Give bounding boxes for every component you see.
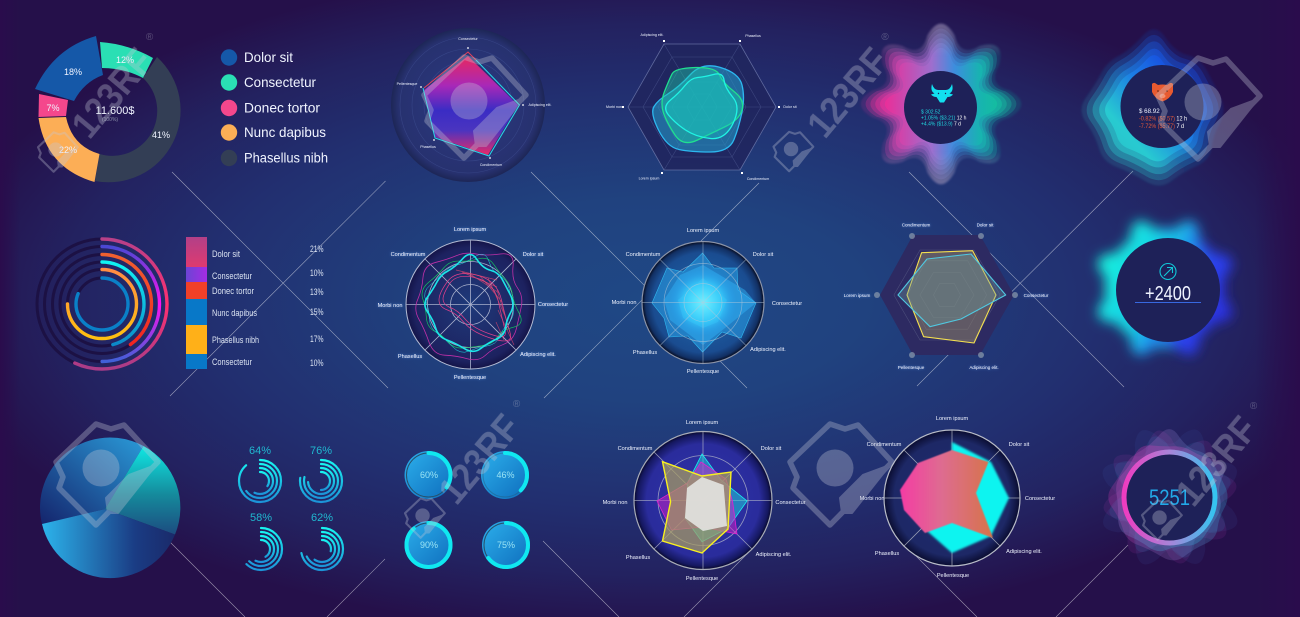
percent disks — [404, 451, 530, 569]
radar: dark hexagon: Consectetur — [1024, 293, 1049, 298]
radar: filled blurred polygons: Adipiscing elit. — [1006, 549, 1042, 555]
radar: dark hexagon: Pellentesque — [898, 365, 925, 370]
radar: hexagon with blobs: Adipiscing elit. — [641, 33, 663, 37]
radar: overlapping polygons — [603, 420, 806, 582]
radar: filled blurred polygons: Morbi non — [860, 496, 884, 502]
watermark text: 123RF — [800, 41, 897, 146]
radar: blue star: Condimentum — [626, 252, 661, 258]
radar: blue star: Dolor sit — [753, 252, 774, 258]
radar: gradient pentagon: Consectetur — [458, 37, 478, 41]
glowing counter — [1071, 194, 1259, 382]
watermark text: ® — [513, 399, 521, 410]
donut legend: Nunc dapibus — [244, 124, 326, 140]
radar: multi-line: Pellentesque — [454, 375, 486, 381]
radar: filled blurred polygons: Lorem ipsum — [936, 416, 968, 422]
watermark text — [64, 32, 1266, 514]
stacked bar with labels: 21% — [310, 244, 324, 254]
radar: blue star: Morbi non — [612, 300, 636, 306]
icon: bull head — [931, 84, 953, 102]
radar: gradient pentagon: Phasellus — [420, 145, 436, 149]
stacked bar with labels: 10% — [310, 268, 324, 278]
radar: overlapping polygons: Adipiscing elit. — [756, 552, 792, 558]
radar: multi-line: Dolor sit — [523, 252, 544, 258]
donut chart — [35, 36, 181, 182]
radar: multi-line: Phasellus — [398, 354, 422, 360]
donut chart: 11.600$ — [96, 105, 134, 117]
radar: overlapping polygons: Dolor sit — [761, 446, 782, 452]
bull market gauge: $ 302.52 — [921, 110, 941, 116]
stacked bar with labels: Dolor sit — [212, 249, 240, 259]
radar: filled blurred polygons — [860, 416, 1055, 579]
radar: filled blurred polygons: Phasellus — [875, 551, 899, 557]
donut chart: (100%) — [102, 117, 118, 123]
percent disks: 90% — [420, 540, 438, 550]
bull market gauge — [861, 24, 1021, 184]
concentric progress rings: 64% — [249, 445, 271, 457]
radar: blue star: Pellentesque — [687, 369, 719, 375]
radar: multi-line: Consectetur — [538, 302, 568, 308]
number gauge 5251: 5251 — [1149, 485, 1190, 510]
percent disks: 75% — [497, 540, 515, 550]
stacked bar with labels: 10% — [310, 358, 324, 368]
ring set 76% — [300, 460, 342, 502]
stacked bar with labels: 17% — [310, 334, 324, 344]
radar: gradient pentagon: Adipiscing elit. — [529, 103, 551, 107]
radar: overlapping polygons: Condimentum — [618, 446, 653, 452]
radar: overlapping polygons: Lorem ipsum — [686, 420, 718, 426]
radar: dark hexagon — [844, 222, 1049, 370]
radar: filled blurred polygons: Pellentesque — [937, 573, 969, 579]
radar: gradient pentagon: Pellentesque — [397, 82, 417, 86]
donut chart: 18% — [64, 67, 82, 77]
donut legend: Donec tortor — [244, 100, 320, 116]
number gauge 5251 — [1076, 403, 1264, 591]
stacked bar with labels: Donec tortor — [212, 286, 254, 296]
concentric ring chart — [37, 239, 167, 369]
donut chart: 22% — [59, 145, 77, 155]
ring set 62% — [301, 528, 343, 570]
radar: filled blurred polygons: Condimentum — [867, 442, 902, 448]
concentric progress rings: 58% — [250, 512, 272, 524]
radar: dark hexagon: Dolor sit — [977, 222, 994, 228]
watermark text: 123RF — [1168, 409, 1266, 514]
radar: dark hexagon: Condimentum — [902, 222, 930, 228]
bull market gauge: +4.4% ($13.9) 7 d — [921, 122, 961, 128]
bear market gauge — [1082, 29, 1224, 186]
bear market gauge: -0.82% ($0.57) 12 h — [1139, 116, 1187, 122]
watermark text: 123RF — [431, 407, 529, 512]
radar: multi-line: Adipiscing elit. — [520, 352, 556, 358]
ring set 64% — [239, 460, 281, 502]
radar: multi-line: Morbi non — [378, 303, 402, 309]
radar: filled blurred polygons: Dolor sit — [1009, 442, 1030, 448]
pie chart — [40, 437, 180, 578]
watermark text: ® — [881, 32, 889, 43]
radar: blue star: Phasellus — [633, 350, 657, 356]
bear market gauge: $ 68.92 — [1139, 108, 1160, 115]
stacked bar with labels: Nunc dapibus — [212, 308, 257, 318]
stacked bar with labels — [186, 237, 324, 369]
icon: bear head — [1152, 83, 1173, 102]
radar: blue star: Lorem ipsum — [687, 228, 719, 234]
radar: gradient pentagon: Condimentum — [480, 163, 502, 167]
icon: arrow in circle — [1160, 264, 1176, 280]
radar: blue star: Adipiscing elit. — [750, 347, 786, 353]
radar: overlapping polygons: Pellentesque — [686, 576, 718, 582]
radar: multi-line: Condimentum — [391, 252, 426, 258]
radar: hexagon with blobs: Condimentum — [747, 177, 769, 181]
donut legend: Phasellus nibh — [244, 150, 328, 166]
glowing counter: +2400 — [1145, 283, 1191, 305]
radar: overlapping polygons: Phasellus — [626, 555, 650, 561]
concentric progress rings — [239, 445, 343, 570]
donut chart: 41% — [152, 130, 170, 140]
radar: overlapping polygons: Consectetur — [775, 500, 806, 506]
radar: hexagon with blobs: Dolor sit — [783, 105, 797, 109]
stacked bar with labels: Consectetur — [212, 357, 252, 367]
donut legend: Dolor sit — [244, 49, 293, 65]
radar: overlapping polygons: Morbi non — [603, 500, 627, 506]
ring set 58% — [240, 528, 282, 570]
percent disks: 46% — [496, 470, 515, 480]
watermark text: ® — [1250, 401, 1258, 412]
watermark text: ® — [146, 32, 154, 43]
radar: dark hexagon: Adipiscing elit. — [969, 365, 999, 370]
radar: hexagon with blobs: Lorem ipsum — [639, 176, 659, 180]
radar: gradient pentagon — [391, 28, 551, 182]
percent disks: 60% — [420, 470, 438, 480]
radar: multi-line: Lorem ipsum — [454, 227, 486, 233]
donut chart: 12% — [116, 55, 134, 65]
bear market gauge: -7.72% ($5.77) 7 d — [1139, 123, 1184, 130]
radar: multi-line — [378, 219, 568, 384]
donut chart: 7% — [46, 103, 60, 113]
radar: hexagon with blobs: Phasellus — [745, 34, 761, 38]
stacked bar with labels: Phasellus nibh — [212, 335, 259, 345]
donut legend: Consectetur — [244, 74, 316, 90]
radar: blue star — [612, 228, 802, 375]
watermark: egg logos — [38, 57, 1260, 540]
concentric progress rings: 62% — [311, 512, 333, 524]
donut legend — [221, 49, 328, 166]
bull market gauge: +1.05% ($3.21) 12 h — [921, 116, 967, 122]
radar: blue star: Consectetur — [772, 301, 802, 307]
radar: hexagon with blobs: Morbi non — [606, 105, 622, 109]
stacked bar with labels: 15% — [310, 307, 324, 317]
radar: dark hexagon: Lorem ipsum — [844, 293, 870, 298]
stacked bar with labels: Consectetur — [212, 271, 252, 281]
radar: hexagon with blobs — [606, 33, 797, 181]
concentric progress rings: 76% — [310, 445, 332, 457]
radar: filled blurred polygons: Consectetur — [1025, 496, 1055, 502]
stacked bar with labels: 13% — [310, 287, 324, 297]
watermark text: 123RF — [64, 41, 162, 146]
